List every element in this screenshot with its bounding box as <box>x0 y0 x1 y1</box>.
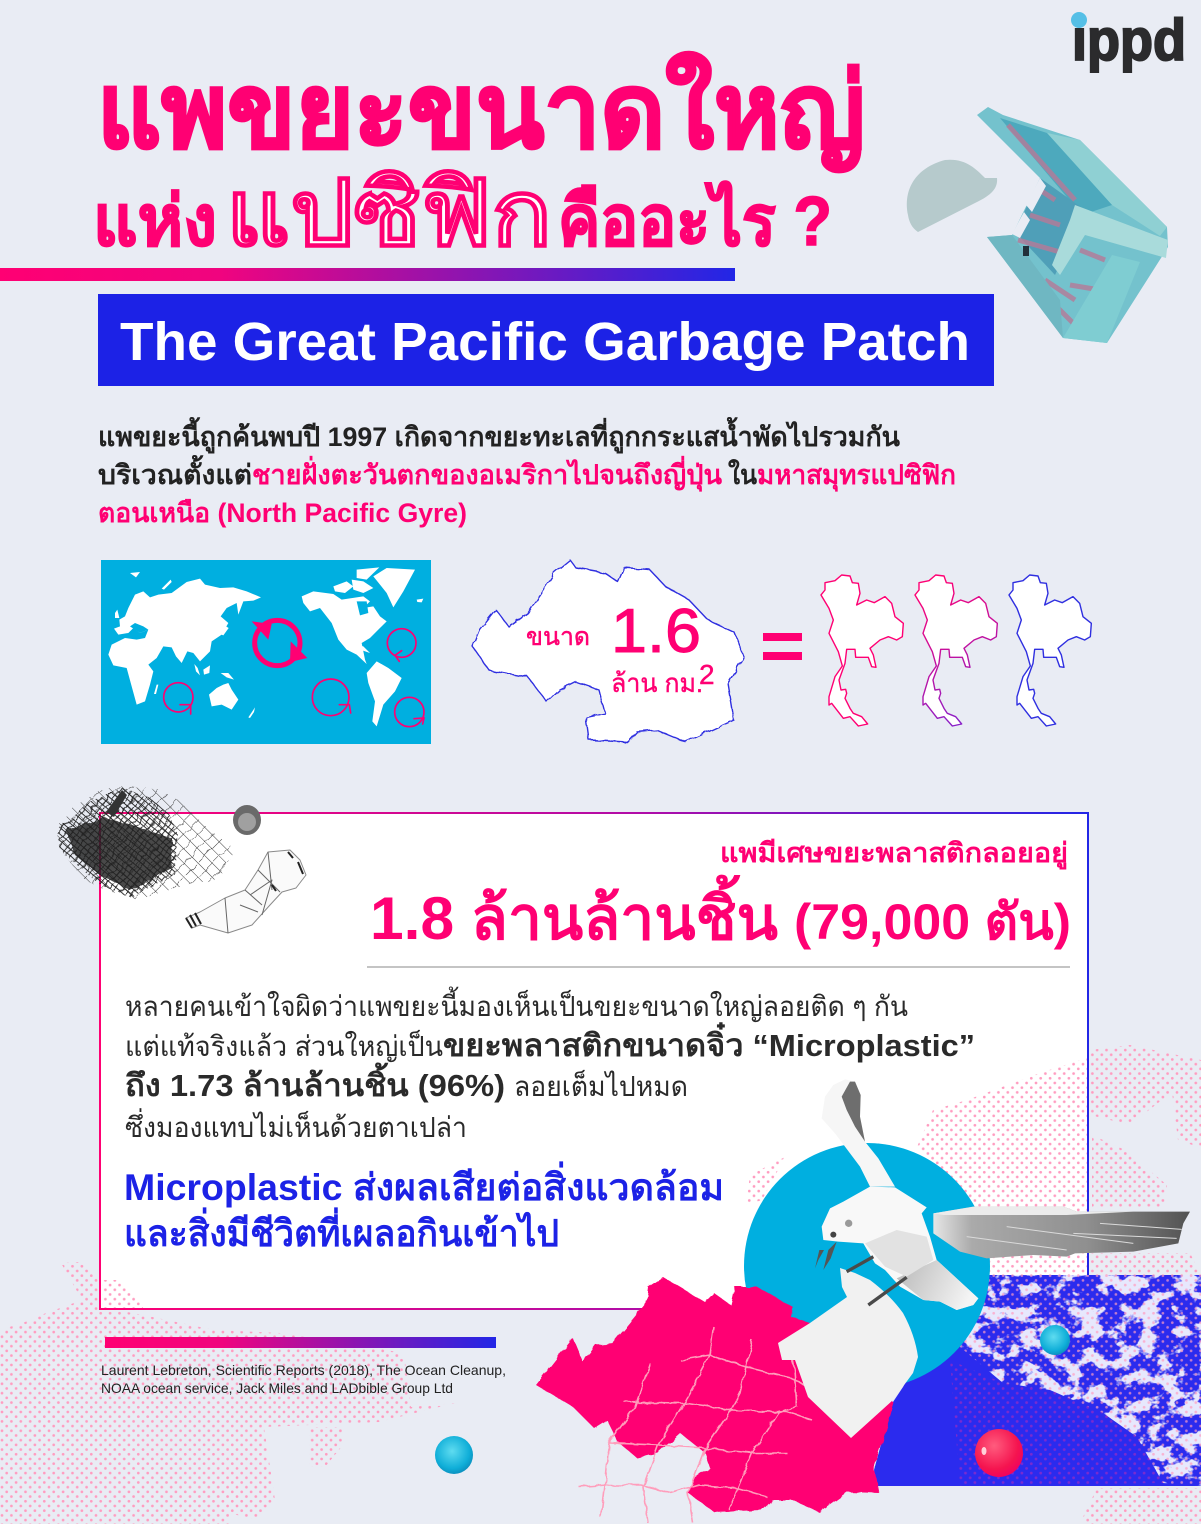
pink map <box>536 1277 894 1512</box>
icon: plastic helmet <box>907 160 997 232</box>
body text: ลอยเต็มไปหมด <box>514 1069 688 1102</box>
intro paragraph: แพขยะนี้ถูกค้นพบปี 1997 เกิดจากขยะทะเลที่ถูกกระแสน้ำพัดไปรวมกัน <box>98 416 901 454</box>
body <box>822 1187 978 1310</box>
net on map <box>579 1327 821 1523</box>
sources: Laurent Lebreton, Scientific Reports (2018), The Ocean Cleanup, <box>101 1362 506 1378</box>
patch area shape with size label: ล้าน กม. <box>611 668 703 698</box>
floating balls <box>1040 1325 1070 1355</box>
equals sign <box>763 633 802 660</box>
beak and legs <box>815 1250 824 1268</box>
body text: ขยะพลาสติกขนาดจิ๋ว “Microplastic” <box>443 1021 975 1063</box>
sources <box>101 1362 506 1396</box>
intro paragraph: ตอนเหนือ (North Pacific Gyre) <box>98 498 467 528</box>
blue callout <box>124 1161 724 1254</box>
three Thailand outlines <box>821 575 1091 726</box>
icon: bottle cap <box>233 805 261 835</box>
intro paragraph: ชายฝั่งตะวันตกของอเมริกาไปจนถึงญี่ปุ่น <box>252 455 723 492</box>
title: แพขยะขนาดใหญ่ <box>97 52 865 173</box>
banner: The Great Pacific Garbage Patch <box>98 294 994 386</box>
decorative blue ball <box>435 1436 473 1474</box>
blue callout: Microplastic ส่งผลเสียต่อสิ่งแวดล้อม <box>124 1161 724 1208</box>
intro paragraph <box>98 416 956 528</box>
body text: ซึ่งมองแทบไม่เห็นด้วยตาเปล่า <box>125 1108 467 1143</box>
collage: seagull, bag, map and sea <box>536 1079 1201 1523</box>
intro paragraph: บริเวณตั้งแต่ <box>98 454 252 490</box>
intro paragraph: มหาสมุทรแปซิฟิก <box>757 460 956 492</box>
icon: crushed plastic bottle <box>186 850 306 933</box>
body text: หลายคนเข้าใจผิดว่าแพขยะนี้มองเห็นเป็นขยะขนาดใหญ่ลอยติด ๆ กัน <box>125 986 908 1022</box>
title: แปซิฟิก <box>226 163 552 265</box>
icon: plastic crate <box>977 107 1168 343</box>
big number: 1.8 ล้านล้านชิ้น <box>370 874 778 952</box>
gyre arrows <box>164 620 424 727</box>
world map with ocean gyres <box>101 560 431 744</box>
icon: fishing net <box>57 785 236 900</box>
upper wing <box>822 1079 895 1187</box>
logo: ippd: ippd <box>1072 8 1186 73</box>
body text: ถึง 1.73 ล้านล้านชิ้น (96%) <box>125 1062 505 1103</box>
title <box>93 52 865 265</box>
body text <box>125 986 975 1143</box>
big number <box>370 874 1071 952</box>
title: คืออะไร ? <box>558 180 832 260</box>
patch area shape with size label: 1.6 <box>611 597 701 666</box>
patch area shape with size label <box>473 560 744 742</box>
halftone inside panel <box>102 1058 1087 1308</box>
blue circle <box>744 1143 990 1389</box>
body text: แต่แท้จริงแล้ว ส่วนใหญ่เป็น <box>125 1029 443 1062</box>
plastic bag <box>778 1268 918 1438</box>
title: แห่ง <box>93 182 217 260</box>
halftone dot texture <box>0 1045 1201 1524</box>
sources: NOAA ocean service, Jack Miles and LADbible Group Ltd <box>101 1380 453 1396</box>
panel heading: แพมีเศษขยะพลาสติกลอยอยู่ <box>720 838 1068 870</box>
intro paragraph: ใน <box>728 459 757 490</box>
patch area shape with size label: ขนาด <box>526 623 590 651</box>
seagull <box>815 1079 1190 1310</box>
right wing <box>933 1207 1190 1258</box>
gradient divider <box>0 268 735 281</box>
gradient divider bottom <box>105 1337 496 1348</box>
patch area shape with size label: 2 <box>699 659 715 690</box>
big number: (79,000 ตัน) <box>794 894 1071 950</box>
banner: The Great Pacific Garbage Patch: The Great Pacific Garbage Patch <box>120 312 970 372</box>
blue callout: และสิ่งมีชีวิตที่เผลอกินเข้าไป <box>124 1207 559 1254</box>
panel: plastic facts <box>100 813 1088 1309</box>
sea texture <box>874 1270 1201 1490</box>
